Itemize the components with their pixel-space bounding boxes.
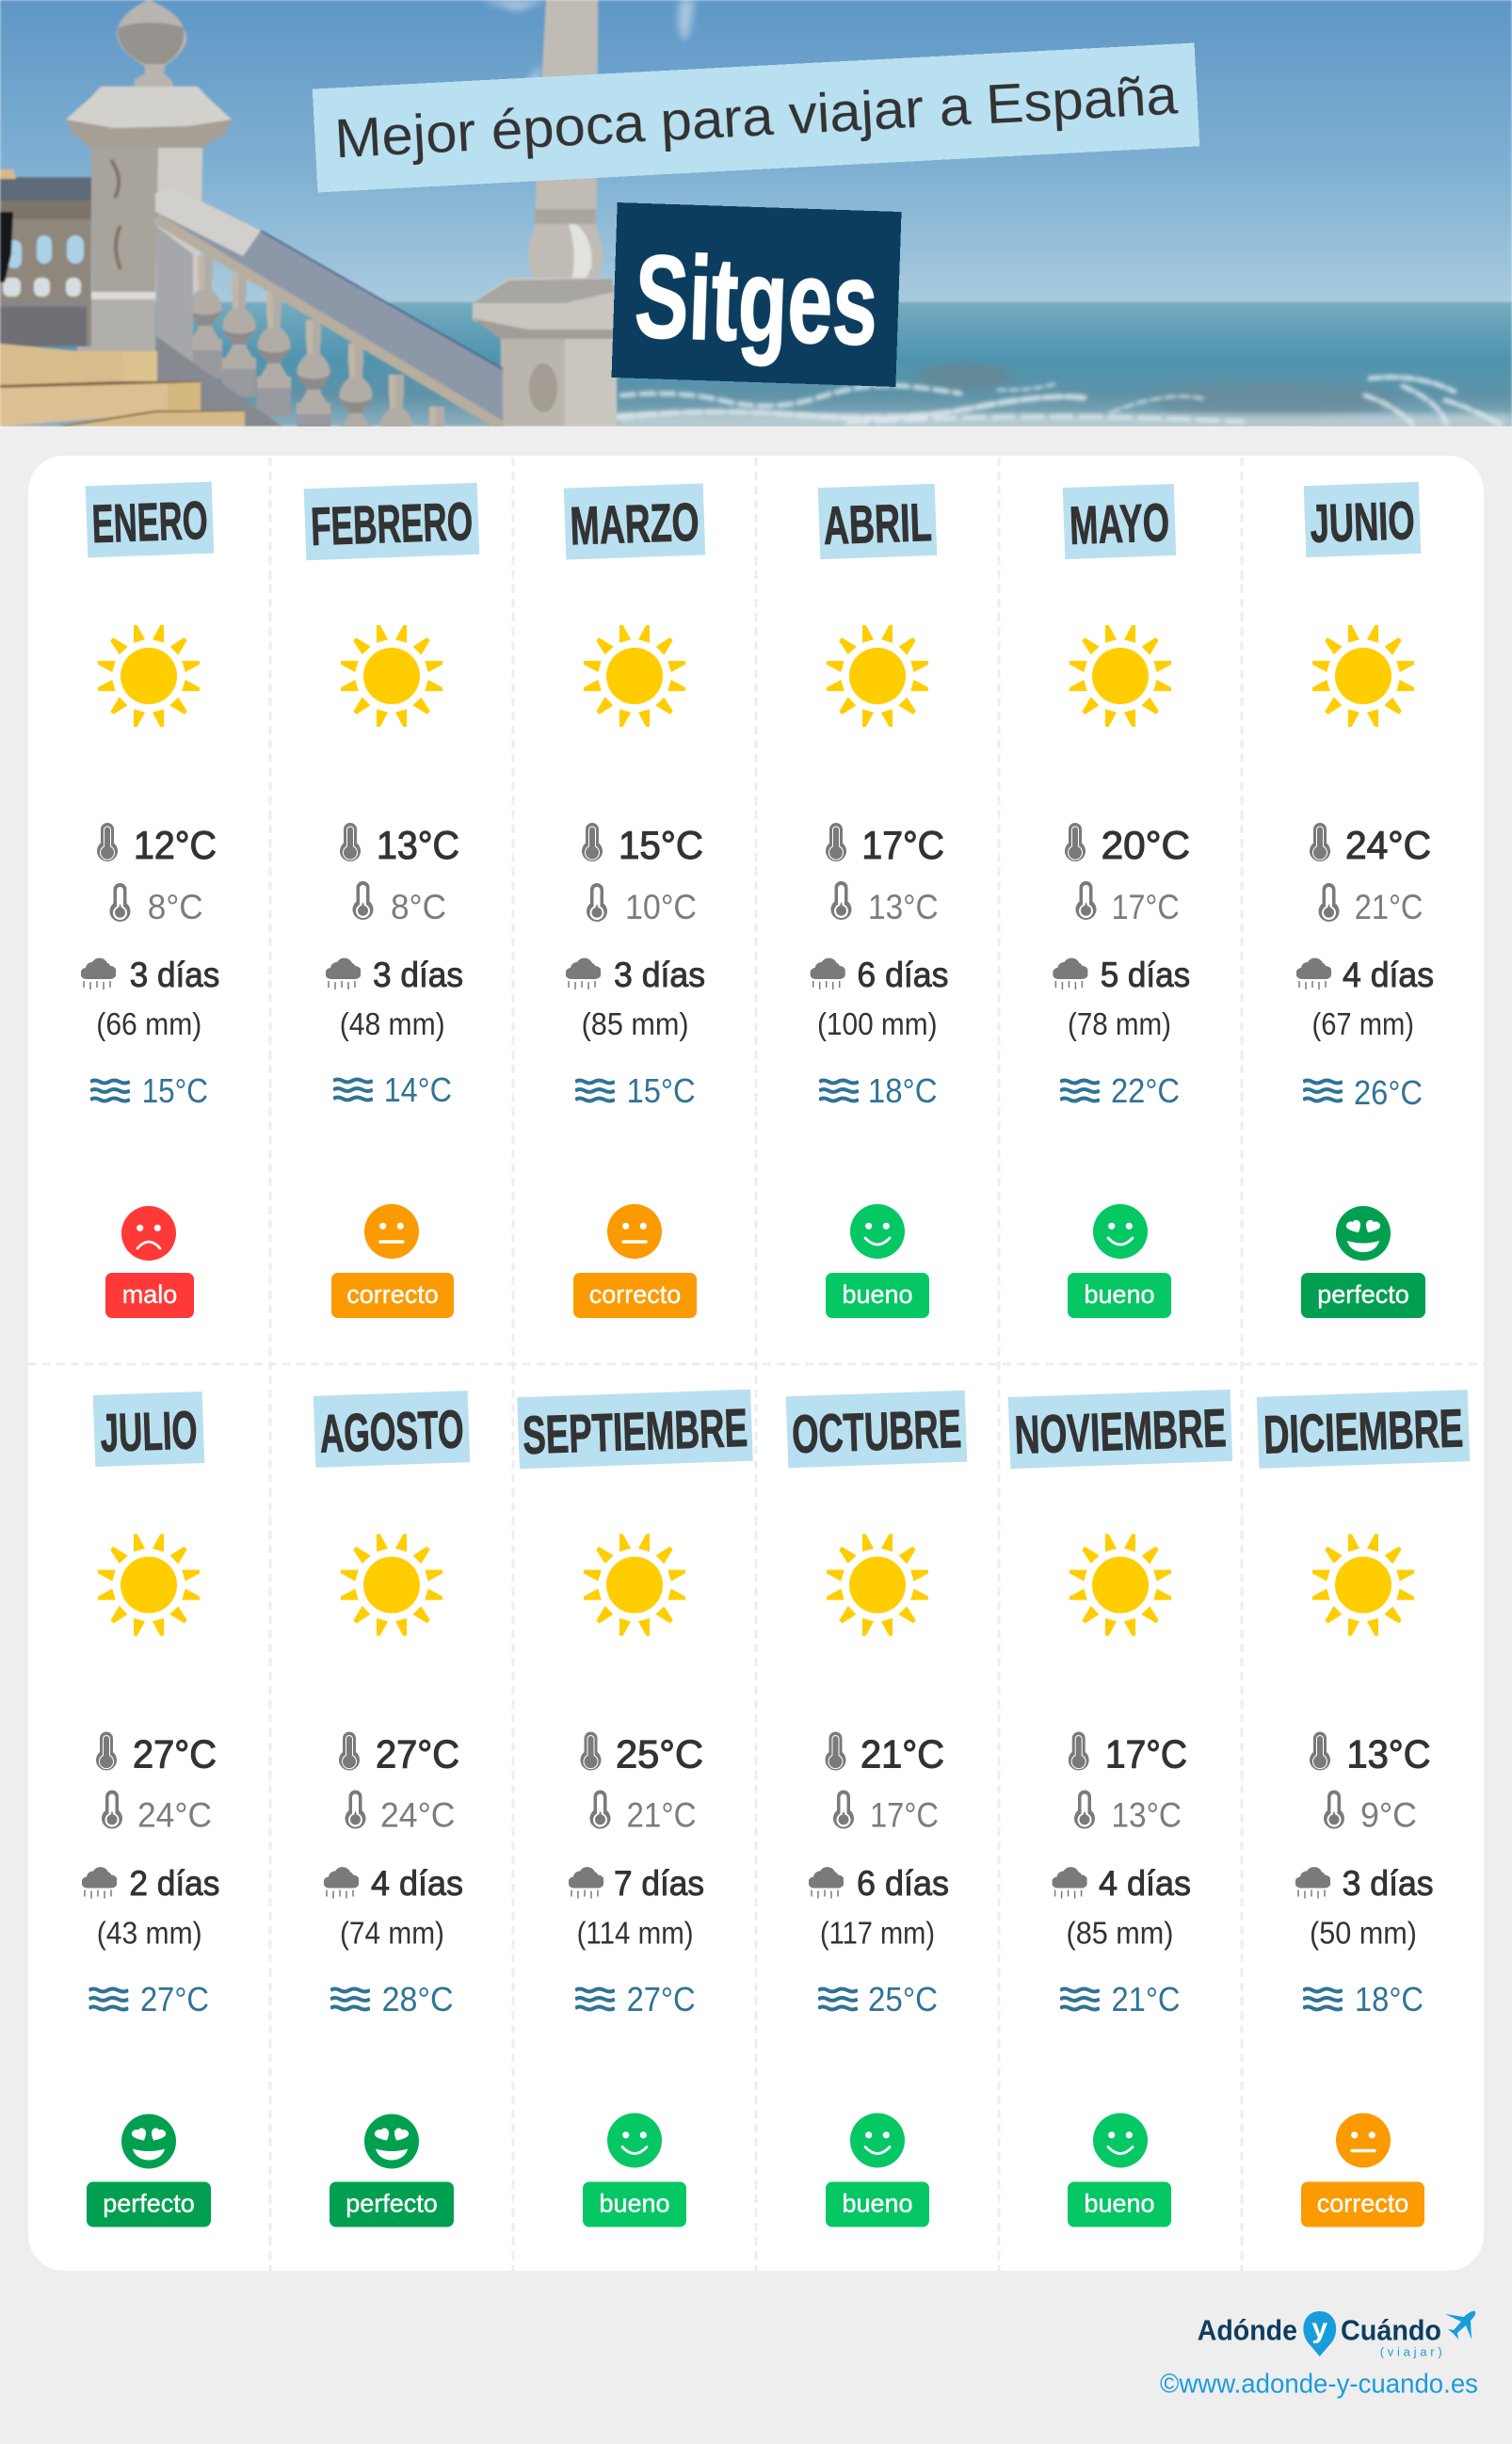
month label bbox=[314, 1391, 470, 1468]
panel: diciembre bbox=[1257, 1390, 1470, 2227]
month label: JULIO bbox=[100, 1400, 199, 1464]
sea temperature: 27°C bbox=[140, 1980, 209, 2018]
sloping rail bbox=[154, 212, 504, 426]
sea temperature bbox=[330, 1980, 454, 2018]
sea temperature bbox=[818, 1980, 938, 2018]
rainy days: 3 días bbox=[130, 956, 219, 994]
icon: sun bbox=[1312, 625, 1414, 727]
low temperature: 9°C bbox=[1360, 1796, 1417, 1834]
low temperature bbox=[1074, 1791, 1182, 1834]
panel: second row of months bbox=[81, 1390, 1470, 2227]
month label bbox=[304, 483, 479, 560]
precipitation: (50 mm) bbox=[1310, 1915, 1417, 1951]
sea temperature: 28°C bbox=[382, 1980, 454, 2018]
panel: mayo bbox=[1053, 484, 1190, 1318]
precipitation: (114 mm) bbox=[577, 1915, 694, 1951]
stone steps bbox=[0, 343, 124, 386]
low temperature: 10°C bbox=[625, 888, 697, 926]
rating: correcto: correcto bbox=[346, 1280, 439, 1309]
low temperature bbox=[1324, 1791, 1417, 1834]
panel: abril bbox=[810, 484, 948, 1318]
sea temperature bbox=[1060, 1980, 1181, 2018]
month label: NOVIEMBRE bbox=[1014, 1398, 1228, 1466]
footer logo: Cuándo bbox=[1341, 2314, 1441, 2347]
low temperature bbox=[833, 1791, 939, 1834]
rating: correcto: correcto bbox=[1317, 2190, 1408, 2218]
precipitation: (100 mm) bbox=[817, 1006, 938, 1041]
high temperature bbox=[339, 1732, 459, 1776]
sea temperature: 15°C bbox=[627, 1071, 696, 1110]
high temperature: 15°C bbox=[619, 823, 703, 867]
low temperature: 24°C bbox=[137, 1796, 212, 1834]
rainy days: 4 días bbox=[371, 1864, 463, 1903]
high temperature: 17°C bbox=[861, 823, 944, 867]
rating: perfecto: perfecto bbox=[1317, 1280, 1409, 1309]
sea temperature bbox=[333, 1070, 452, 1109]
month label bbox=[818, 484, 937, 559]
sea temperature bbox=[90, 1071, 208, 1110]
rainy days bbox=[565, 956, 705, 994]
rating: bueno bbox=[826, 2113, 929, 2227]
rating: correcto bbox=[331, 1204, 454, 1318]
high temperature bbox=[97, 823, 217, 867]
panel: octubre bbox=[786, 1391, 967, 2227]
sea temperature bbox=[575, 1980, 696, 2018]
sea temperature: 27°C bbox=[627, 1980, 696, 2018]
rating: correcto bbox=[1301, 2113, 1424, 2227]
rating: perfecto bbox=[87, 2114, 211, 2227]
rating: perfecto: perfecto bbox=[346, 2190, 438, 2218]
precipitation: (117 mm) bbox=[820, 1915, 935, 1951]
sea temperature bbox=[1060, 1071, 1180, 1110]
month label bbox=[786, 1391, 967, 1468]
precipitation: (66 mm) bbox=[96, 1006, 201, 1041]
precipitation: (43 mm) bbox=[97, 1915, 202, 1951]
rainy days bbox=[81, 1864, 219, 1903]
icon: sun bbox=[98, 1535, 200, 1636]
rating: bueno: bueno bbox=[1084, 1280, 1155, 1309]
low temperature bbox=[352, 881, 446, 926]
panel: marzo bbox=[564, 483, 705, 1318]
rainy days: 3 días bbox=[373, 956, 463, 994]
month label: OCTUBRE bbox=[791, 1399, 962, 1465]
precipitation: (48 mm) bbox=[340, 1006, 445, 1041]
rating: correcto bbox=[573, 1204, 697, 1318]
sea temperature: 25°C bbox=[868, 1980, 938, 2018]
month label: ABRIL bbox=[823, 492, 933, 556]
icon: sun bbox=[1070, 1535, 1171, 1636]
low temperature: 17°C bbox=[870, 1796, 939, 1834]
low temperature bbox=[830, 881, 939, 926]
month label bbox=[1008, 1390, 1232, 1469]
sea temperature bbox=[88, 1980, 209, 2018]
low temperature bbox=[1075, 881, 1180, 926]
rating: bueno: bueno bbox=[842, 2190, 913, 2218]
icon: sun bbox=[1070, 625, 1171, 727]
panel: julio bbox=[81, 1391, 219, 2227]
rating: correcto: correcto bbox=[589, 1280, 681, 1309]
rainy days bbox=[80, 956, 219, 994]
rating: malo: malo bbox=[122, 1280, 177, 1309]
sea temperature bbox=[1303, 1073, 1423, 1112]
high temperature: 13°C bbox=[1346, 1732, 1431, 1776]
rating: perfecto bbox=[330, 2114, 454, 2227]
rainy days: 6 días bbox=[857, 956, 948, 994]
rating: perfecto: perfecto bbox=[103, 2190, 195, 2218]
icon: sun bbox=[1312, 1535, 1414, 1636]
rainy days bbox=[1053, 956, 1190, 994]
panel: climate calendar card bbox=[28, 456, 1484, 2271]
high temperature: 27°C bbox=[133, 1732, 217, 1776]
rainy days bbox=[808, 1864, 949, 1903]
rating: perfecto bbox=[1301, 1206, 1425, 1318]
title banner bbox=[313, 43, 1199, 192]
panel: febrero bbox=[304, 483, 479, 1318]
rating: bueno: bueno bbox=[842, 1280, 913, 1309]
low temperature: 13°C bbox=[868, 888, 939, 926]
first pillar and finial bbox=[90, 0, 188, 292]
far pole bbox=[528, 0, 603, 284]
panel: septiembre bbox=[517, 1390, 753, 2227]
low temperature: 21°C bbox=[1355, 888, 1423, 926]
month label bbox=[517, 1390, 753, 1469]
rainy days bbox=[1052, 1864, 1191, 1903]
sea temperature: 22°C bbox=[1111, 1071, 1180, 1110]
sea temperature: 26°C bbox=[1354, 1073, 1423, 1112]
sea temperature: 18°C bbox=[868, 1071, 938, 1110]
icon: sun bbox=[827, 625, 928, 727]
icon: sun bbox=[584, 625, 685, 727]
left balustrade bbox=[0, 217, 92, 347]
sea temperature: 15°C bbox=[142, 1071, 208, 1110]
low temperature: 21°C bbox=[627, 1796, 697, 1834]
sea temperature bbox=[819, 1071, 938, 1110]
high temperature bbox=[340, 823, 459, 867]
precipitation: (85 mm) bbox=[1066, 1915, 1173, 1951]
low temperature bbox=[102, 1791, 212, 1834]
icon: sun bbox=[584, 1535, 685, 1636]
month label: FEBRERO bbox=[310, 491, 474, 557]
high temperature: 24°C bbox=[1345, 823, 1431, 867]
precipitation: (74 mm) bbox=[340, 1915, 444, 1951]
icon: location pin bbox=[1303, 2311, 1336, 2356]
high temperature bbox=[825, 1732, 944, 1776]
rainy days: 4 días bbox=[1343, 956, 1434, 994]
rainy days: 2 días bbox=[129, 1864, 219, 1903]
month label bbox=[1304, 482, 1421, 557]
month label: SEPTIEMBRE bbox=[522, 1398, 748, 1466]
month label: MARZO bbox=[570, 492, 700, 556]
low temperature: 8°C bbox=[391, 888, 446, 926]
footer logo bbox=[1198, 2311, 1475, 2359]
second pillar bbox=[473, 278, 617, 426]
high temperature bbox=[96, 1732, 217, 1776]
panel: junio bbox=[1295, 482, 1434, 1318]
city banner: Sitges bbox=[633, 232, 880, 370]
rainy days: 5 días bbox=[1101, 956, 1190, 994]
rainy days bbox=[325, 956, 463, 994]
month label: JUNIO bbox=[1310, 490, 1416, 555]
footer logo: (viajar) bbox=[1380, 2345, 1442, 2359]
high temperature: 12°C bbox=[134, 823, 217, 867]
low temperature bbox=[109, 883, 203, 926]
high temperature: 17°C bbox=[1105, 1732, 1187, 1776]
rating: bueno: bueno bbox=[1084, 2190, 1155, 2218]
rainy days bbox=[323, 1864, 463, 1903]
month label bbox=[86, 482, 214, 557]
month label bbox=[1063, 484, 1176, 559]
high temperature bbox=[1310, 823, 1431, 867]
rainy days bbox=[1295, 956, 1434, 994]
high temperature: 20°C bbox=[1102, 823, 1190, 867]
city banner bbox=[611, 202, 902, 387]
rainy days bbox=[568, 1864, 704, 1903]
low temperature bbox=[589, 1791, 697, 1834]
high temperature: 25°C bbox=[616, 1732, 703, 1776]
high temperature: 21°C bbox=[861, 1732, 944, 1776]
high temperature bbox=[1310, 1732, 1431, 1776]
low temperature: 8°C bbox=[148, 888, 203, 926]
rating: bueno bbox=[826, 1204, 929, 1318]
panel: enero bbox=[80, 482, 219, 1318]
icon: sun bbox=[341, 1535, 442, 1636]
month label: AGOSTO bbox=[319, 1399, 465, 1465]
precipitation: (78 mm) bbox=[1068, 1006, 1171, 1041]
month label: MAYO bbox=[1069, 492, 1170, 556]
icon: sun bbox=[341, 625, 442, 727]
low temperature: 17°C bbox=[1112, 888, 1180, 926]
rating: bueno bbox=[1068, 2113, 1171, 2227]
sea temperature bbox=[575, 1071, 696, 1110]
rating: bueno bbox=[583, 2113, 686, 2227]
header photo: stone balustrade and sea bbox=[0, 0, 1512, 426]
panel: noviembre bbox=[1008, 1390, 1232, 2227]
low temperature: 13°C bbox=[1111, 1796, 1182, 1834]
high temperature: 13°C bbox=[377, 823, 459, 867]
precipitation: (85 mm) bbox=[582, 1006, 689, 1041]
icon: plane bbox=[1445, 2311, 1475, 2339]
rainy days: 3 días bbox=[614, 956, 705, 994]
low temperature bbox=[587, 883, 697, 926]
rating: malo bbox=[105, 1206, 194, 1318]
high temperature bbox=[1069, 1732, 1187, 1776]
rainy days: 7 días bbox=[614, 1864, 704, 1903]
low temperature: 24°C bbox=[380, 1796, 456, 1834]
high temperature bbox=[582, 823, 703, 867]
precipitation: (67 mm) bbox=[1312, 1006, 1414, 1041]
sea temperature bbox=[1303, 1980, 1424, 2018]
rating: bueno: bueno bbox=[599, 2190, 670, 2218]
panel: agosto bbox=[314, 1391, 470, 2227]
rating: bueno bbox=[1068, 1204, 1171, 1318]
icon: sun bbox=[98, 625, 200, 727]
icon: location pin: y bbox=[1311, 2313, 1327, 2344]
baluster row bbox=[188, 256, 222, 378]
title banner: Mejor época para viajar a España bbox=[333, 65, 1180, 169]
high temperature bbox=[826, 823, 944, 867]
sea temperature: 21°C bbox=[1111, 1980, 1181, 2018]
rainy days: 6 días bbox=[857, 1864, 949, 1903]
high temperature: 27°C bbox=[376, 1732, 459, 1776]
footer logo: Adónde bbox=[1198, 2314, 1297, 2347]
sea temperature: 18°C bbox=[1355, 1980, 1424, 2018]
low temperature bbox=[1318, 883, 1423, 926]
month label bbox=[564, 483, 705, 560]
rainy days: 3 días bbox=[1343, 1864, 1434, 1903]
low temperature bbox=[345, 1791, 456, 1834]
icon: sun bbox=[827, 1535, 928, 1636]
rainy days: 4 días bbox=[1099, 1864, 1191, 1903]
rainy days bbox=[810, 956, 948, 994]
rainy days bbox=[1295, 1864, 1434, 1903]
sea temperature: 14°C bbox=[384, 1070, 452, 1109]
month label bbox=[93, 1391, 204, 1467]
footer website url: ©www.adonde-y-cuando.es bbox=[1160, 2370, 1478, 2400]
month label: ENERO bbox=[91, 490, 209, 555]
